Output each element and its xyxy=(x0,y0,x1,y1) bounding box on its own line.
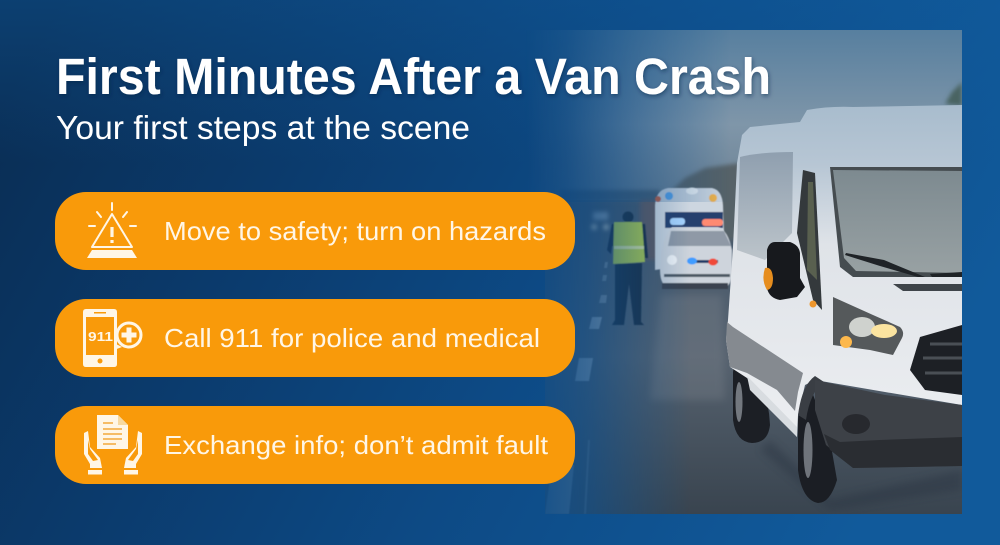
front wheel xyxy=(798,392,837,503)
icon: phone with medical bubble: 911 xyxy=(88,329,113,344)
lane markings xyxy=(545,262,608,514)
cab door window xyxy=(797,170,822,310)
grille xyxy=(910,325,962,395)
photo: roadside scene with van xyxy=(500,30,962,514)
windscreen xyxy=(830,167,962,277)
mirror indicator xyxy=(763,268,773,290)
pill xyxy=(55,192,575,270)
icon: hands holding document xyxy=(84,415,142,474)
van body xyxy=(726,105,962,437)
white rocker xyxy=(747,376,797,437)
side mirror xyxy=(767,242,805,300)
label: Exchange info; don’t admit fault xyxy=(164,430,549,460)
label: Call 911 for police and medical xyxy=(164,323,540,353)
wipers xyxy=(845,253,925,277)
hood vent xyxy=(893,284,962,291)
front bumper xyxy=(815,382,962,448)
wet road reflection xyxy=(650,295,725,400)
label: Move to safety; turn on hazards xyxy=(164,216,546,246)
officer in hi-vis vest xyxy=(607,212,648,325)
police car xyxy=(660,227,732,289)
side panel window xyxy=(737,152,793,260)
road surface xyxy=(545,202,962,514)
rear wheel xyxy=(733,369,770,443)
sky xyxy=(548,30,962,195)
front wheel arch xyxy=(798,376,824,420)
road shadow under van xyxy=(765,444,959,498)
headlight xyxy=(833,297,903,355)
step 2: call 911 xyxy=(55,299,575,377)
subtitle: Your first steps at the scene xyxy=(56,109,470,146)
ambulance xyxy=(655,188,725,270)
lower grey sill xyxy=(726,322,803,411)
title: First Minutes After a Van Crash xyxy=(56,48,771,105)
distant treeline xyxy=(560,82,962,260)
pill xyxy=(55,406,575,484)
white van xyxy=(726,105,962,510)
step 3: exchange info xyxy=(55,406,575,484)
icon: phone with medical bubble xyxy=(83,309,141,367)
icon: warning triangle xyxy=(87,203,137,258)
step 1: move to safety xyxy=(55,192,575,270)
pill xyxy=(55,299,575,377)
